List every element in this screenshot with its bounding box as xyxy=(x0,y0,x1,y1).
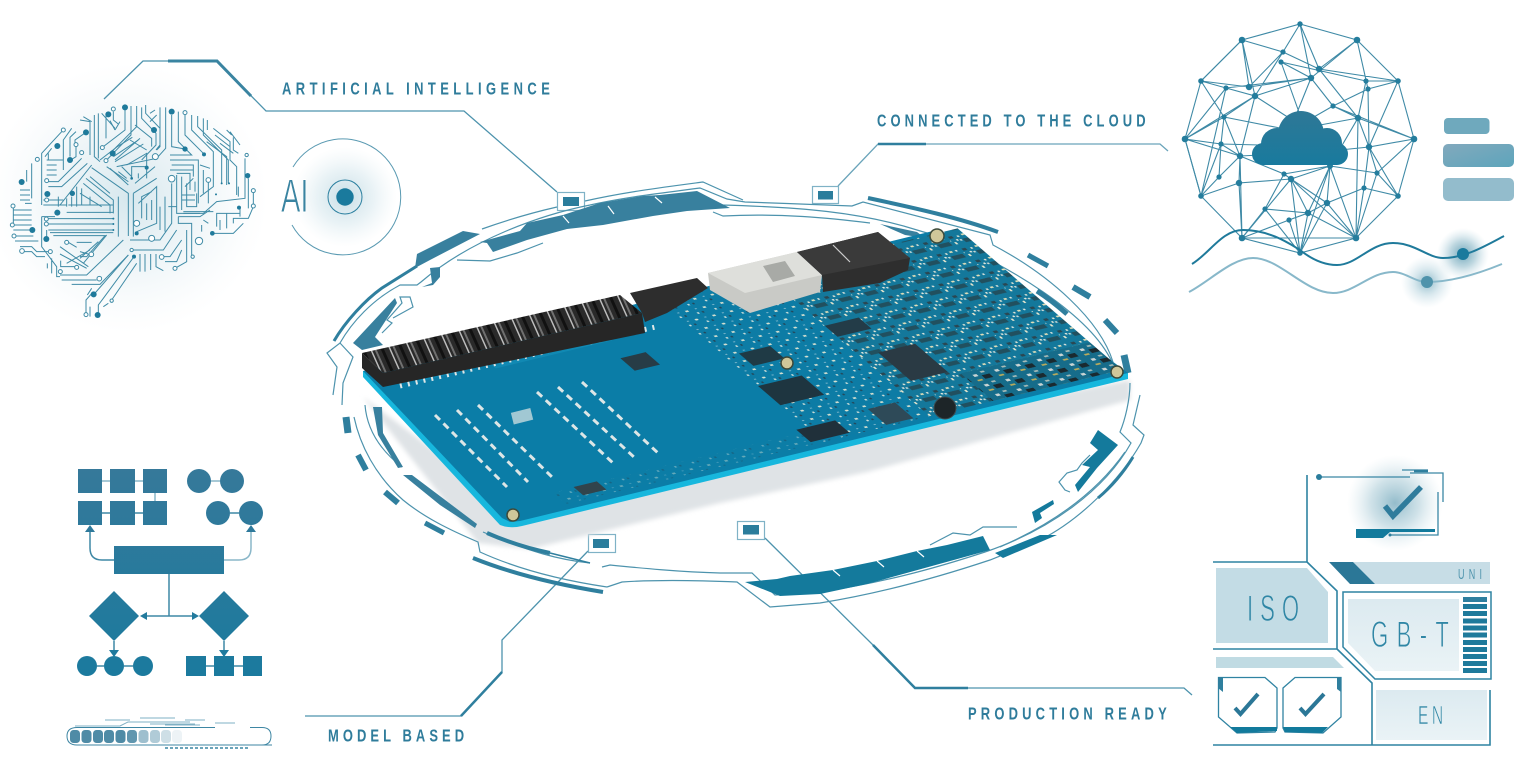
panel: GB-T xyxy=(1343,592,1491,679)
label: model based: MODEL BASED xyxy=(328,727,464,746)
flowchart xyxy=(77,469,263,676)
callout line: model based xyxy=(305,534,616,716)
panel: light strip xyxy=(1216,657,1344,668)
flowchart shapes xyxy=(77,469,263,676)
panel: ISO xyxy=(1216,568,1328,643)
solder rows xyxy=(435,382,658,487)
inductor xyxy=(934,397,956,419)
long pin header xyxy=(362,278,708,387)
circuit board xyxy=(362,228,1128,527)
board shadow xyxy=(363,380,1130,549)
callout line: cloud xyxy=(812,144,1168,204)
progress circuit detail xyxy=(75,718,235,726)
brain glow xyxy=(0,63,268,333)
board edge xyxy=(363,371,1128,527)
panel: UNI xyxy=(1329,562,1490,584)
icon: check box left xyxy=(1218,677,1277,733)
progress pills xyxy=(70,730,182,743)
ring thin lines xyxy=(327,182,1144,607)
black connector xyxy=(797,232,910,292)
icon: AI target: AI xyxy=(281,171,309,223)
ring notches xyxy=(563,197,662,223)
ring dark segments xyxy=(334,198,1133,592)
waves xyxy=(1189,228,1504,308)
network connector xyxy=(708,252,822,313)
ring around the board xyxy=(327,182,1144,607)
lighter pads along the header xyxy=(415,333,608,383)
panel frame lines xyxy=(1213,475,1490,745)
panel: ISO: ISO xyxy=(1247,588,1299,629)
board surface xyxy=(363,230,1128,522)
board details in board plane xyxy=(397,228,1122,505)
label: production ready: PRODUCTION READY xyxy=(968,705,1167,724)
network mesh xyxy=(1185,24,1414,253)
extra brain traces xyxy=(20,110,240,307)
callout line: production ready xyxy=(738,522,1192,695)
mounting holes xyxy=(507,229,1123,521)
callout line: artificial intelligence xyxy=(104,61,584,210)
status bars xyxy=(1443,118,1514,201)
level bars xyxy=(1463,597,1487,673)
progress frame xyxy=(67,728,272,745)
icon: check box right xyxy=(1283,677,1341,733)
icon: circuit brain xyxy=(10,104,255,318)
ring dark shapes lower xyxy=(745,430,1118,596)
panel: GB-T: GB-T xyxy=(1371,614,1449,655)
panel: EN xyxy=(1376,690,1487,740)
label: connected to the cloud: CONNECTED TO THE CLOUD xyxy=(877,112,1146,131)
label: artificial intelligence: ARTIFICIAL INTELLIGENCE xyxy=(282,80,550,99)
ring dark shapes upper xyxy=(353,191,925,528)
silkscreen logo xyxy=(511,408,533,424)
flowchart connectors xyxy=(90,481,251,666)
cloud xyxy=(1252,111,1348,165)
header pins xyxy=(400,326,660,386)
icon: cloud network xyxy=(1182,21,1417,256)
progress bar xyxy=(67,718,272,748)
network nodes xyxy=(1182,21,1417,256)
panel: EN: EN xyxy=(1418,701,1443,730)
icon: highlighted check xyxy=(1316,455,1443,551)
panel: UNI: UNI xyxy=(1458,566,1482,583)
icon: AI target xyxy=(281,139,401,255)
